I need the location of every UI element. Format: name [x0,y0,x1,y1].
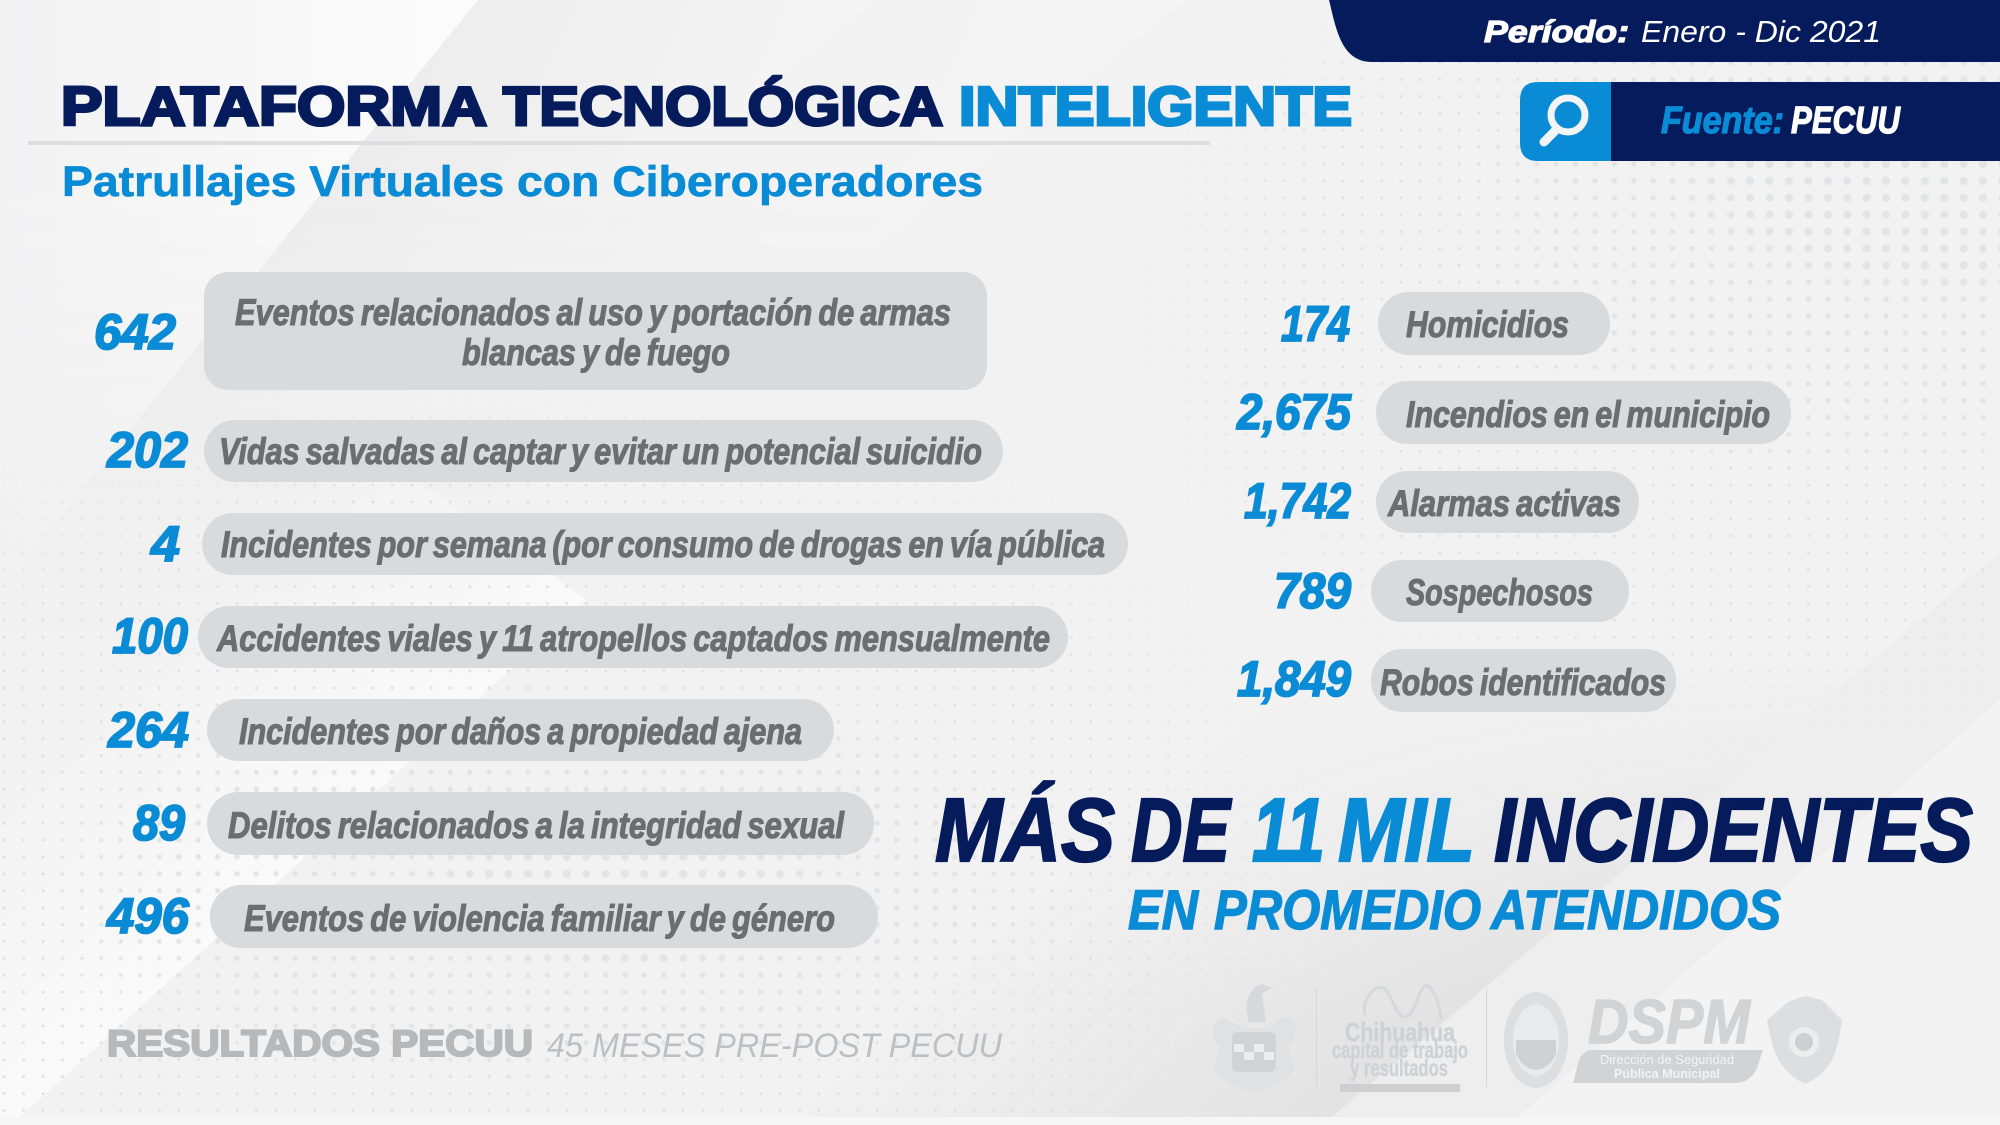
logos [1213,984,1842,1092]
stat: 100 accidentes [112,606,1068,668]
stat: 1,742 alarmas: 1,742 [1244,473,1351,529]
footer note [107,1023,1002,1065]
stat: 1,849 robos: 1,849 [1237,651,1351,707]
stat: 264 daños [107,699,834,761]
stat: 496 violencia: 496 [106,888,190,944]
headline callout: ATENDIDOS [1489,878,1781,941]
stat: 202 suicidio: 202 [106,422,188,478]
stat: 174 homicidios: 174 [1281,296,1350,352]
period banner [1329,0,2000,62]
stat: 100 accidentes: 100 [112,608,188,664]
source box: PECUU [1791,100,1901,142]
footer note: RESULTADOS PECUU [107,1023,533,1064]
stat: 642 armas: blancas y de fuego [462,332,730,373]
stat: 2,675 incendios: Incendios en el municipio [1406,394,1770,435]
headline callout: EN [1128,878,1199,941]
stat: 1,849 robos: Robos identificados [1380,662,1666,703]
stat: 89 delitos [133,792,874,855]
stat: 642 armas [94,272,987,390]
stat: 642 armas: 642 [94,304,176,360]
stat: 496 violencia [106,885,878,948]
logo: DSPM: Dirección de Seguridad [1600,1052,1734,1067]
headline callout: 11 [1252,781,1325,881]
icon: magnifying glass [1544,98,1585,142]
headline callout [935,780,1973,941]
logo: Chihuahua capital: y resultados [1350,1055,1448,1081]
stat: 264 daños: Incidentes por daños a propiedad ajena [239,711,802,752]
stat: 496 violencia: Eventos de violencia familiar y de género [244,898,835,939]
stat: 202 suicidio [106,420,1003,482]
stat: 174 homicidios: Homicidios [1406,304,1569,345]
headline callout: PROMEDIO [1214,878,1481,941]
stat: 2,675 incendios [1236,381,1791,444]
stat: 89 delitos: 89 [133,795,185,851]
period banner: Período: [1484,14,1629,49]
logo: shield badge [1767,996,1842,1084]
logo: Chihuahua capital: Chihuahua [1345,1017,1455,1047]
stat: 789 sospechosos [1274,560,1629,622]
stat: 4 drogas [150,513,1128,575]
stat: 1,742 alarmas: Alarmas activas [1387,483,1621,524]
headline callout: MIL [1338,781,1475,881]
logo: police badge [1504,992,1568,1088]
title: TECNOLÓGICA [503,75,943,137]
headline callout: MÁS [935,780,1115,881]
stat: 642 armas: Eventos relacionados al uso y portación de armas [235,292,951,333]
period banner: Enero - Dic 2021 [1641,14,1881,49]
headline callout: DE [1131,781,1232,881]
stat: 4 drogas: Incidentes por semana (por consumo de drogas en vía pública [221,524,1105,565]
subtitle: Patrullajes Virtuales con Ciberoperadores [62,158,983,206]
logo: DSPM: DSPM [1588,988,1751,1057]
title: PLATAFORMA [61,75,487,137]
stat: 89 delitos: Delitos relacionados a la integridad sexual [228,805,845,846]
stat: 264 daños: 264 [107,702,189,758]
logo: coat of arms [1213,984,1296,1092]
stat: 1,742 alarmas [1244,471,1639,533]
logo: Chihuahua capital [1332,986,1468,1092]
source box: Fuente: [1661,100,1784,142]
source box [1520,82,2000,161]
logo: DSPM [1573,988,1763,1083]
logo: DSPM: Pública Municipal [1614,1066,1720,1081]
stat: 4 drogas: 4 [150,516,180,572]
logo: Chihuahua capital: capital de trabajo [1332,1037,1468,1063]
stat: 202 suicidio: Vidas salvadas al captar y evitar un potencial suicidio [219,431,982,472]
footer note: 45 MESES PRE-POST PECUU [547,1027,1002,1065]
stat: 789 sospechosos: Sospechosos [1406,572,1593,613]
stat: 1,849 robos [1237,649,1676,712]
stat: 789 sospechosos: 789 [1274,563,1351,619]
stat: 2,675 incendios: 2,675 [1236,384,1352,440]
stat: 100 accidentes: Accidentes viales y 11 atropellos captados mensualmente [216,618,1050,659]
title: INTELIGENTE [959,75,1352,137]
stat: 174 homicidios [1281,292,1610,355]
title [61,75,1352,137]
